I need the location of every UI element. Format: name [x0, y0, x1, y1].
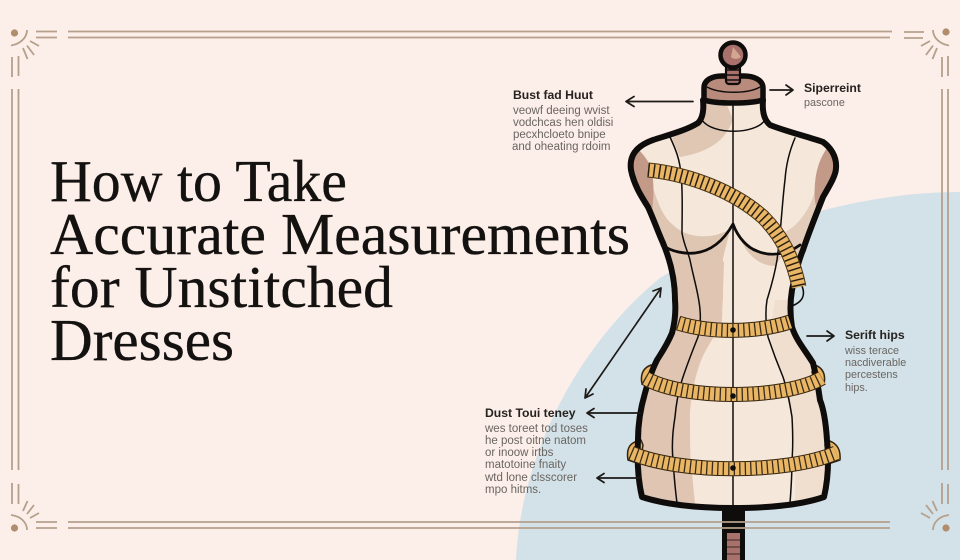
arrow: to bust label [626, 96, 693, 106]
waist measuring tape [678, 322, 790, 333]
arrow: to lower body label [587, 408, 640, 418]
label: hips: Serift hips [845, 328, 905, 342]
label: lower body [484, 406, 588, 496]
label: hips: wiss terace [844, 345, 899, 357]
bust shade: right [776, 190, 823, 258]
label: bust: vodchcas hen oldisi [513, 117, 613, 129]
corner ornament: bottom left [11, 501, 39, 532]
title [50, 148, 630, 373]
arm cap: left [631, 148, 654, 212]
label: hips [844, 328, 906, 394]
left torso shade [638, 262, 724, 504]
mannequin stand [722, 505, 745, 560]
label: lower body: Dust Toui teney [485, 406, 576, 420]
corner ornament: bottom right [921, 501, 950, 532]
label: bust: Bust fad Huut [513, 88, 593, 102]
title: Accurate Measurements [50, 201, 630, 267]
label: hips: hips. [845, 382, 868, 394]
blue background shape [516, 192, 960, 560]
title: Dresses [50, 307, 234, 373]
neck cap [704, 76, 763, 103]
hip tape back pieces [641, 365, 825, 387]
arrow: to neck label [770, 85, 793, 95]
arrow: to hips label [807, 331, 834, 341]
arrow: to hem label [597, 474, 640, 482]
chest measuring tape [648, 170, 799, 287]
label: lower body: or inoow irtbs [485, 447, 554, 459]
label: hips: percestens [845, 369, 898, 381]
arrow: torso length [585, 288, 661, 398]
body seams [670, 100, 795, 508]
label: neck: pascone [804, 97, 845, 109]
bust shade: left [648, 178, 730, 300]
top knob [720, 42, 746, 84]
shoulder shade [672, 100, 732, 157]
dress form mannequin [628, 42, 840, 508]
body fill [631, 100, 836, 508]
corner ornament: top right [921, 28, 950, 59]
label: lower body: wes toreet tod toses [484, 423, 588, 435]
label: lower body: he post oitne natom [485, 435, 586, 447]
chest tape tail [792, 286, 804, 306]
arm cap: right [815, 148, 836, 209]
label: lower body: wtd lone clsscorer [484, 472, 577, 484]
label: neck [804, 81, 861, 109]
title: How to Take [50, 148, 347, 214]
label: lower body: matotoine fnaity [485, 459, 566, 471]
label: bust: pecxhcloeto bnipe [513, 129, 606, 141]
bust lines [662, 224, 800, 254]
corner ornament: top left [11, 29, 39, 59]
body outline [631, 100, 836, 508]
label: hips: nacdiverable [845, 357, 906, 369]
lower hip measuring tape [631, 453, 836, 471]
right side tone [770, 300, 828, 503]
title: for Unstitched [50, 254, 393, 320]
label: bust: and oheating rdoim [512, 141, 610, 153]
lower hip tape back pieces [628, 440, 840, 464]
label: neck: Siperreint [804, 81, 861, 95]
bust shade: under right [738, 232, 782, 266]
hip measuring tape [645, 378, 822, 399]
label: lower body: mpo hitms. [485, 484, 541, 496]
label: bust [512, 88, 613, 153]
label: bust: veowf deeing wvist [513, 105, 610, 117]
